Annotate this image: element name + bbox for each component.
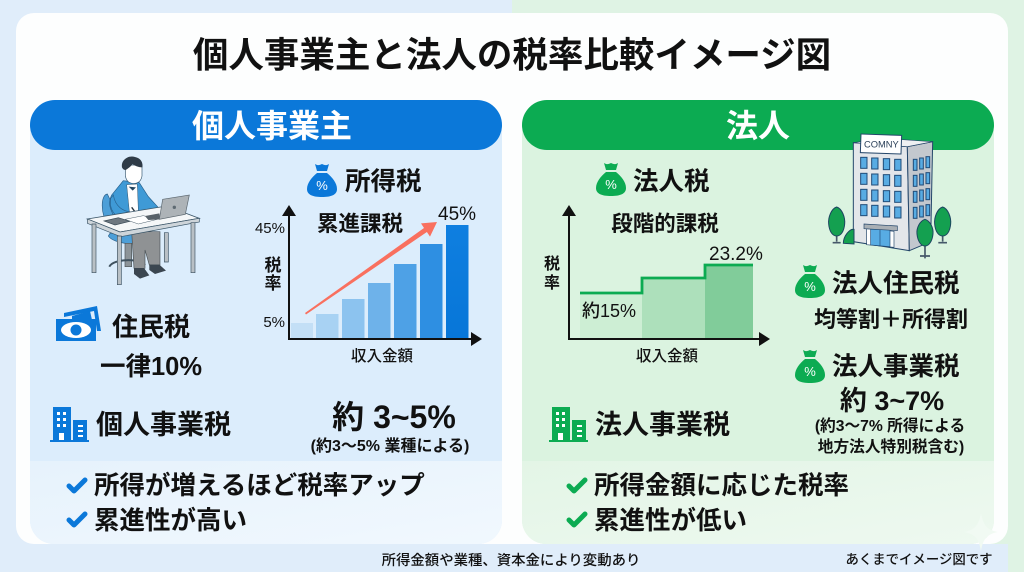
footnote: centre: 所得金額や業種、資本金により変動あり (382, 552, 640, 569)
法人事業税 (549, 407, 730, 442)
icon: money bag (795, 350, 825, 383)
checklist: 法人: 累進性が低い (594, 506, 747, 535)
法人住民税: 均等割＋所得割 (814, 307, 968, 332)
panel body: green (522, 125, 994, 544)
panel header: 法人: 法人 (726, 108, 790, 144)
checklist: 個人事業主: 所得が増えるほど税率アップ (94, 471, 425, 500)
法人事業税 rate: 地方法人特別税含む) (818, 437, 964, 456)
bar chart: 所得税: 5% (263, 314, 285, 331)
bar chart: 所得税: 45% (255, 220, 285, 237)
summary band background: green (522, 461, 994, 544)
rate: 約 3~5%: 約 3~5% (332, 399, 456, 435)
法人事業税: 法人事業税 (595, 410, 730, 440)
住民税: 住民税 (112, 312, 190, 342)
step chart: 法人税: 率 (544, 274, 560, 292)
label: 累進課税: 累進課税 (317, 212, 403, 236)
step chart: 法人税: 税 (544, 255, 560, 273)
step chart: 法人税: 収入金額 (636, 347, 698, 365)
法人住民税: 法人住民税 (832, 270, 960, 298)
arrow: rising rate (305, 222, 437, 314)
checklist: 法人: 所得金額に応じた税率 (594, 472, 849, 500)
法人事業税 rate: (約3〜7% 所得による (815, 417, 965, 435)
個人事業税 (50, 407, 231, 442)
法人税 heading: 法人税 (633, 168, 710, 196)
icon: money bag (795, 265, 825, 298)
icon: money bag: % (316, 178, 328, 193)
panel header: 法人 (522, 100, 994, 150)
bar chart: 所得税: 45% (438, 204, 476, 225)
panel body: blue (30, 125, 502, 544)
法人住民税 (795, 265, 968, 332)
icon: check (69, 480, 85, 491)
bar chart: 所得税: 率 (264, 274, 282, 293)
checklist: 法人 (569, 472, 849, 535)
illustration: person at desk (87, 157, 199, 285)
bar chart: 所得税 (255, 204, 482, 365)
panel header: 個人事業主 (30, 100, 502, 150)
法人税 heading (596, 163, 710, 196)
住民税 (56, 306, 202, 381)
panel: 個人事業主 (30, 100, 502, 544)
title: 個人事業主と法人の税率比較イメージ図 (193, 35, 831, 75)
法人事業税 rate: 約 3~7% (840, 386, 944, 416)
所得税 heading (307, 164, 422, 197)
label: 段階的課税: 段階的課税 (611, 212, 719, 236)
法人事業税 rate: 法人事業税 (832, 353, 960, 381)
icon: money bag: % (804, 364, 816, 379)
icon: building (549, 407, 588, 442)
bar chart: 所得税: 収入金額 (351, 347, 413, 365)
panel: 法人 (522, 100, 994, 544)
summary band background: blue (30, 461, 502, 544)
panel header: 個人事業主: 個人事業主 (192, 108, 352, 144)
illustration: office building (829, 134, 951, 258)
所得税 heading: 所得税 (345, 168, 422, 196)
rate: 約 3~5%: (約3〜5% 業種による) (311, 437, 469, 455)
住民税: 一律10% (100, 353, 202, 381)
法人事業税 rate (795, 350, 965, 456)
icon: check (569, 514, 585, 525)
icon: check (569, 480, 585, 491)
step chart: 法人税: 約15% (582, 301, 636, 321)
icon: check (69, 514, 85, 525)
checklist: 個人事業主: 累進性が高い (94, 506, 247, 535)
checklist: 個人事業主 (69, 471, 425, 535)
icon: money bag: % (605, 177, 617, 192)
icon: sparkle (964, 513, 998, 551)
icon: banknotes (56, 306, 101, 341)
step chart: 法人税: 23.2% (709, 244, 763, 265)
icon: money bag: % (804, 279, 816, 294)
rate: 約 3~5% (311, 399, 469, 455)
illustration: office building: COMNY (864, 140, 899, 150)
個人事業税: 個人事業税 (96, 410, 231, 440)
bar chart: 所得税: 税 (264, 256, 282, 275)
footnote: right: あくまでイメージ図です (845, 552, 993, 567)
icon: building (50, 407, 89, 442)
step chart: 法人税 (544, 205, 770, 365)
